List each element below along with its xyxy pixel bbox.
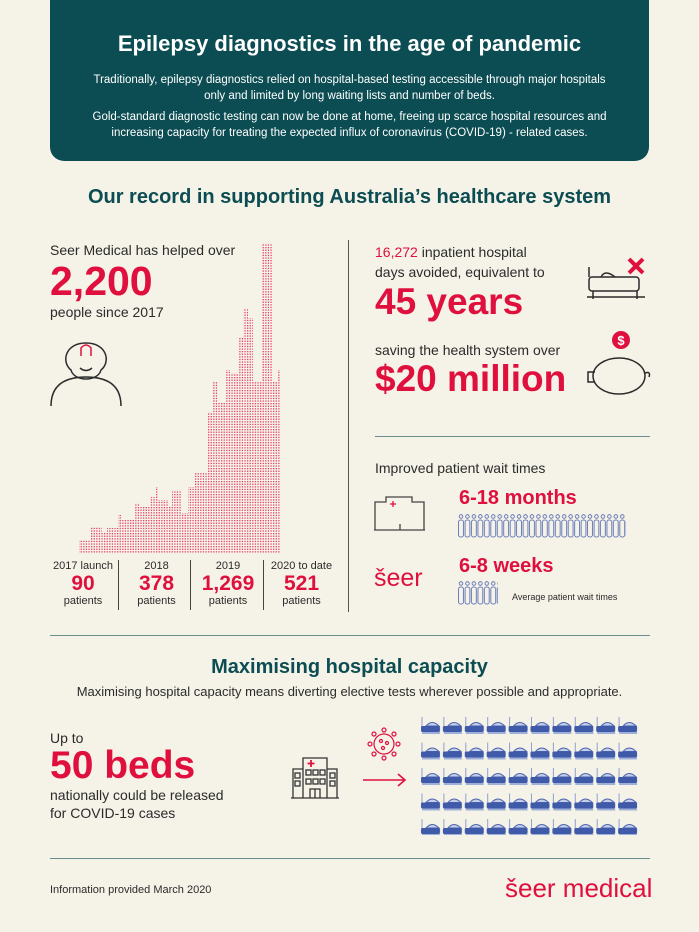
stat 2019: 2019 patients	[209, 560, 247, 607]
stat: 45 years: 45 years	[375, 281, 523, 322]
stat 2020: 521	[284, 572, 319, 595]
stat 2019	[190, 560, 265, 610]
people icons row	[458, 514, 626, 538]
stat 2020: 2020 to date patients	[271, 560, 332, 607]
stat: 50 beds: 50 beds	[50, 744, 195, 787]
wait: 6-18 months: 6-18 months	[459, 487, 577, 509]
bed grid	[421, 717, 638, 835]
icon: hospital building	[291, 757, 339, 799]
dot chart: patients over time	[79, 243, 280, 552]
intro text	[92, 74, 606, 139]
caption: Average patient wait times	[512, 592, 617, 602]
seer logo: šeer	[374, 564, 423, 592]
year stats row	[53, 560, 332, 610]
intro text: increasing capacity for treating the expected influx of coronavirus (COVID-19) - related cases.	[111, 127, 588, 139]
header panel	[50, 0, 649, 161]
title: Epilepsy diagnostics in the age of pandemic	[118, 31, 581, 56]
stat: 2,200 people: people since 2017	[50, 304, 164, 320]
people icons small	[458, 581, 498, 604]
stat: 2,200 people: 2,200	[50, 258, 153, 304]
section heading: capacity: Maximising hospital capacity	[211, 656, 488, 678]
arrow	[363, 773, 406, 787]
stat: 45 years: days avoided, equivalent to	[375, 264, 545, 280]
stat 2018	[118, 560, 194, 610]
stat 2017: 90	[71, 572, 95, 595]
icon: piggy bank: $	[617, 333, 625, 348]
icon: hospital bed with cross	[587, 258, 645, 299]
footer note: Information provided March 2020	[50, 884, 211, 896]
icon: hospital outline	[374, 496, 425, 531]
wait times heading: Improved patient wait times	[375, 460, 545, 476]
stat 2018: 378	[139, 572, 174, 595]
wait: 6-8 weeks: 6-8 weeks	[459, 555, 554, 577]
intro text: Traditionally, epilepsy diagnostics relied on hospital-based testing accessible through major hospitals	[93, 74, 606, 86]
stat 2017: 2017 launch patients	[53, 560, 113, 607]
icon: virus	[367, 727, 401, 761]
stat: 2,200 people	[50, 242, 235, 320]
subtitle: Maximising hospital capacity means diverting elective tests wherever possible and appropriate.	[77, 684, 622, 699]
stat: 45 years	[375, 244, 545, 322]
stat: 45 years: 16,272 inpatient hospital	[375, 244, 527, 260]
stat: 50 beds: nationally could be released	[50, 787, 224, 803]
stat: $20 million: $20 million	[375, 358, 566, 399]
seer medical logo: šeer medical	[505, 873, 652, 903]
stat 2018: 2018 patients	[137, 560, 176, 607]
stat: 2,200 people: Seer Medical has helped over	[50, 242, 235, 258]
stat: 50 beds: Up to	[50, 730, 83, 746]
stat 2019: 1,269	[202, 572, 254, 595]
stat: 50 beds: for COVID-19 cases	[50, 805, 175, 821]
intro text: only and limited by long waiting lists and number of beds. Gold-standard diagnostic testing can now be done at home, freeing up scarce hospital resources and	[92, 90, 606, 123]
icon: person with EEG	[50, 342, 122, 406]
stat: $20 million: saving the health system over	[375, 342, 560, 358]
icon: piggy bank	[587, 331, 650, 395]
stat: 50 beds	[50, 730, 224, 821]
section heading: record: Our record in supporting Australia’s healthcare system	[88, 186, 611, 208]
